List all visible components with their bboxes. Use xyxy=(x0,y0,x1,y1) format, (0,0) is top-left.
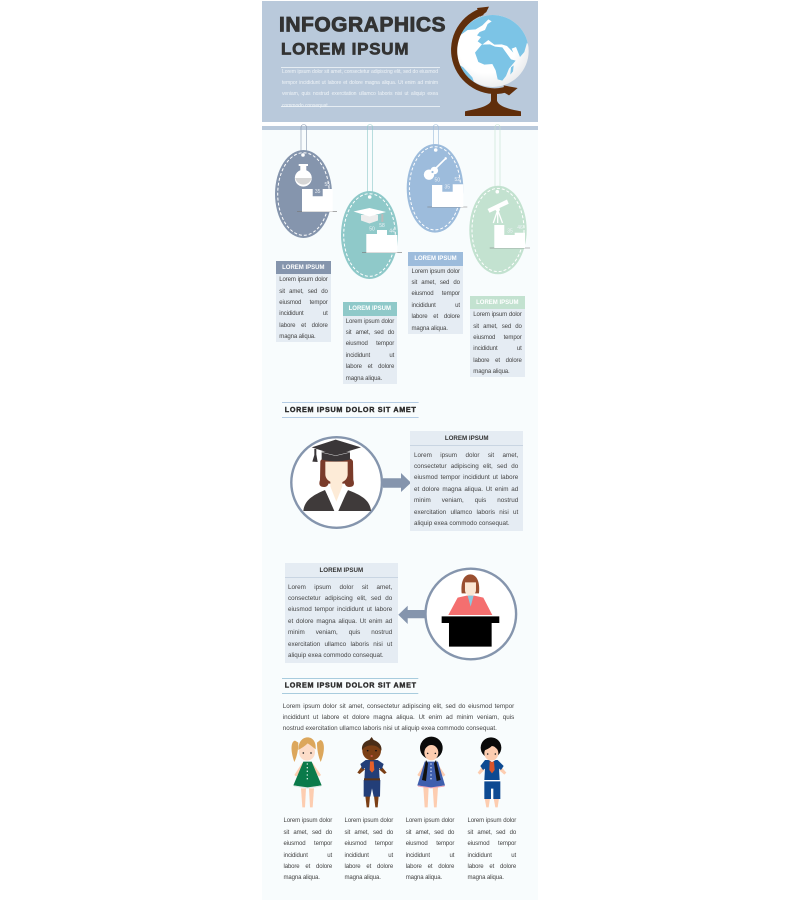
column text 1: eiusmod tempor xyxy=(284,841,332,847)
portrait ring xyxy=(291,437,382,528)
tag shape xyxy=(469,186,527,274)
column text 3 xyxy=(406,818,454,881)
card text: labore et dolore xyxy=(346,364,394,370)
box heading: LOREM IPSUM xyxy=(445,435,488,442)
header background xyxy=(262,0,538,122)
card heading xyxy=(470,296,525,309)
card text xyxy=(473,312,522,375)
arrow: graduate to text xyxy=(383,473,410,492)
card text xyxy=(346,318,394,382)
bar chart: 50 xyxy=(369,226,375,232)
column text 1 xyxy=(284,818,332,881)
tag shape xyxy=(341,191,398,279)
title line 1: INFOGRAPHICS xyxy=(279,14,446,37)
title line 2: LOREM IPSUM xyxy=(281,39,408,58)
tag 1: flask xyxy=(275,124,337,238)
column text 3: Lorem ipsum dolor xyxy=(406,818,454,824)
text box 2 xyxy=(285,563,398,663)
card text: sit amet, sed do xyxy=(473,324,522,330)
box text: eiusmod tempor incididunt ut labore xyxy=(414,474,518,481)
hanging loop xyxy=(495,124,500,194)
icon: boy with blue uniform xyxy=(478,737,506,808)
card heading: LOREM IPSUM xyxy=(476,300,518,306)
card text: labore et dolore xyxy=(411,314,460,320)
column text 3: sit amet, sed do xyxy=(406,830,454,836)
card text: Lorem ipsum dolor xyxy=(346,319,394,325)
panel: page background xyxy=(262,130,538,900)
bar chart: 50 xyxy=(435,178,440,184)
card text: Lorem ipsum dolor xyxy=(279,277,328,283)
bar chart xyxy=(297,182,337,212)
card text: incididunt ut xyxy=(279,311,328,317)
intro paragraph: tempor incididunt ut labore et dolore magna aliqua. Ut enim ad minim xyxy=(282,80,438,86)
bottom rule xyxy=(281,105,440,108)
card heading: LOREM IPSUM xyxy=(282,264,324,270)
bar chart xyxy=(362,223,402,253)
card text: incididunt ut xyxy=(411,303,460,309)
globe ball xyxy=(455,14,530,89)
bar chart xyxy=(427,177,467,207)
card text: Lorem ipsum dolor xyxy=(473,312,522,318)
card text: magna aliqua. xyxy=(279,334,316,340)
box text: eiusmod tempor incididunt ut labore xyxy=(288,606,392,613)
tag hole xyxy=(368,195,372,199)
card text: eiusmod tempor xyxy=(279,300,328,306)
card heading xyxy=(342,302,397,316)
column text 4: Lorem ipsum dolor xyxy=(468,818,516,824)
bar chart: 35 xyxy=(445,185,450,191)
card text: sit amet, sed do xyxy=(411,280,460,286)
bar chart: 35 xyxy=(315,189,321,195)
icon: girl with black braids xyxy=(417,736,446,808)
section paragraph xyxy=(283,703,514,732)
column text 1: sit amet, sed do xyxy=(284,830,332,836)
column text 4: magna aliqua. xyxy=(468,875,504,881)
icon: telescope xyxy=(488,200,509,223)
icon: graduate portrait xyxy=(290,436,383,529)
card text: incididunt ut xyxy=(346,353,394,359)
column text 4: eiusmod tempor xyxy=(468,841,516,847)
column text 2: eiusmod tempor xyxy=(344,841,393,847)
section paragraph: nostrud exercitation ullamco laboris nisi ut aliquip exea commodo consequat. xyxy=(283,725,497,732)
bar chart: 46 xyxy=(517,225,523,231)
box text: Lorem ipsum dolor sit amet, xyxy=(288,584,392,591)
box text xyxy=(414,452,518,527)
column text 2: Lorem ipsum dolor xyxy=(344,818,393,824)
card text: eiusmod tempor xyxy=(346,341,394,347)
hanging loop xyxy=(301,124,306,158)
globe stand arc xyxy=(451,7,521,116)
card heading: LOREM IPSUM xyxy=(349,306,391,312)
bar chart: 35 xyxy=(507,228,513,234)
arrow: speaker to text xyxy=(398,606,424,624)
card 2 xyxy=(342,302,397,384)
card text: labore et dolore xyxy=(473,358,522,364)
column text 2: incididunt ut xyxy=(344,853,393,859)
box text: aliquip exea commodo consequat. xyxy=(414,520,510,527)
tag shape xyxy=(275,150,332,238)
card text: magna aliqua. xyxy=(346,376,382,382)
column text 2 xyxy=(344,818,394,881)
column text 3: incididunt ut xyxy=(406,853,454,859)
speaker figure xyxy=(442,574,499,647)
box text: exercitation ullamco laboris nisi ut xyxy=(288,641,392,648)
bar chart: 55 xyxy=(325,182,330,188)
tag 4: telescope xyxy=(469,124,530,274)
box text: Lorem ipsum dolor sit amet, xyxy=(414,452,518,459)
column text 1: magna aliqua. xyxy=(284,875,320,881)
tag 2: graduation cap xyxy=(341,124,402,279)
card text: incididunt ut xyxy=(473,346,522,352)
card text: eiusmod tempor xyxy=(411,291,460,297)
column text 3: eiusmod tempor xyxy=(406,841,454,847)
hanging loop xyxy=(433,124,438,152)
column text 1: incididunt ut xyxy=(284,853,332,859)
card text: eiusmod tempor xyxy=(473,335,522,341)
column text 3: labore et dolore xyxy=(406,864,454,870)
section heading 2: LOREM IPSUM DOLOR SIT AMET xyxy=(285,681,417,690)
icon: graduation cap xyxy=(354,208,386,224)
box text: minim veniam, quis nostrud xyxy=(414,497,518,504)
intro paragraph: veniam, quis nostrud exercitation ullamco laboris nisi ut aliquip exea xyxy=(282,91,438,97)
bar chart: 52 xyxy=(455,177,460,183)
header intro text xyxy=(281,67,440,109)
box text: consectetur adipiscing elit, sed do xyxy=(288,595,392,602)
section heading 1: LOREM IPSUM DOLOR SIT AMET xyxy=(284,405,416,414)
bar chart xyxy=(490,225,530,248)
box text: et dolore magna aliqua. Ut enim ad xyxy=(414,486,518,493)
box text: et dolore magna aliqua. Ut enim ad xyxy=(288,618,392,625)
title xyxy=(279,14,446,58)
intro paragraph xyxy=(282,69,438,109)
column text 4: incididunt ut xyxy=(468,853,516,859)
tag hole xyxy=(301,153,305,157)
card heading: LOREM IPSUM xyxy=(414,256,457,262)
card text: labore et dolore xyxy=(279,323,328,329)
text box 1 xyxy=(410,431,523,531)
intro paragraph: Lorem ipsum dolor sit amet, consectetur adipiscing elit, sed do eiusmod xyxy=(282,69,438,75)
box text: consectetur adipiscing elit, sed do xyxy=(414,463,518,470)
column text 1: labore et dolore xyxy=(284,864,332,870)
icon: guitar xyxy=(424,157,447,180)
header rule bar xyxy=(262,126,538,130)
column text 3: magna aliqua. xyxy=(406,875,442,881)
column text 4: sit amet, sed do xyxy=(468,830,516,836)
box text xyxy=(288,584,392,659)
box text: exercitation ullamco laboris nisi ut xyxy=(414,509,518,516)
column text 4 xyxy=(468,818,516,881)
box text: minim veniam, quis nostrud xyxy=(288,629,392,636)
column text 2: magna aliqua. xyxy=(344,875,381,881)
icon: flask xyxy=(295,164,312,187)
card 1 xyxy=(276,260,331,342)
card text: magna aliqua. xyxy=(411,326,448,332)
icon: girl with blonde pigtails xyxy=(292,737,324,808)
bar chart: 58 xyxy=(379,223,385,229)
intro paragraph: commodo consequat. xyxy=(282,103,329,109)
card 4 xyxy=(470,296,525,377)
hanging loop xyxy=(367,124,373,198)
section paragraph: Lorem ipsum dolor sit amet, consectetur adipiscing elit, sed do eiusmod tempor xyxy=(283,703,514,710)
card text: Lorem ipsum dolor xyxy=(411,269,460,275)
graduate figure xyxy=(303,440,371,511)
box heading xyxy=(410,431,523,446)
card text: sit amet, sed do xyxy=(346,330,394,336)
icon: globe xyxy=(451,6,529,116)
column text 2: labore et dolore xyxy=(344,864,393,870)
column text 2: sit amet, sed do xyxy=(344,830,393,836)
section heading 1 xyxy=(282,402,419,418)
header band xyxy=(262,1,538,130)
icon: boy with dark skin and navy uniform xyxy=(357,737,387,808)
box text: aliquip exea commodo consequat. xyxy=(288,652,384,659)
top rule xyxy=(281,66,440,69)
card text: magna aliqua. xyxy=(473,369,510,375)
card text xyxy=(411,268,460,332)
card 3 xyxy=(408,252,463,334)
card text xyxy=(279,276,328,340)
card heading xyxy=(408,252,463,266)
tag hole xyxy=(496,190,499,194)
bar chart: 44 xyxy=(389,228,395,234)
tag shape xyxy=(407,144,463,233)
card text: sit amet, sed do xyxy=(279,289,328,295)
tag 3: guitar xyxy=(406,124,468,233)
box heading: LOREM IPSUM xyxy=(320,567,363,574)
box heading xyxy=(285,563,398,578)
tag hole xyxy=(434,148,438,152)
icon: speaker portrait xyxy=(424,568,518,660)
column text 4: labore et dolore xyxy=(468,864,516,870)
portrait ring xyxy=(426,569,516,659)
section heading 2 xyxy=(282,678,418,694)
column text 1: Lorem ipsum dolor xyxy=(284,818,332,824)
card heading xyxy=(276,260,331,274)
section paragraph: incididunt ut labore et dolore magna aliqua. Ut enim ad minim veniam, quis xyxy=(283,714,514,721)
